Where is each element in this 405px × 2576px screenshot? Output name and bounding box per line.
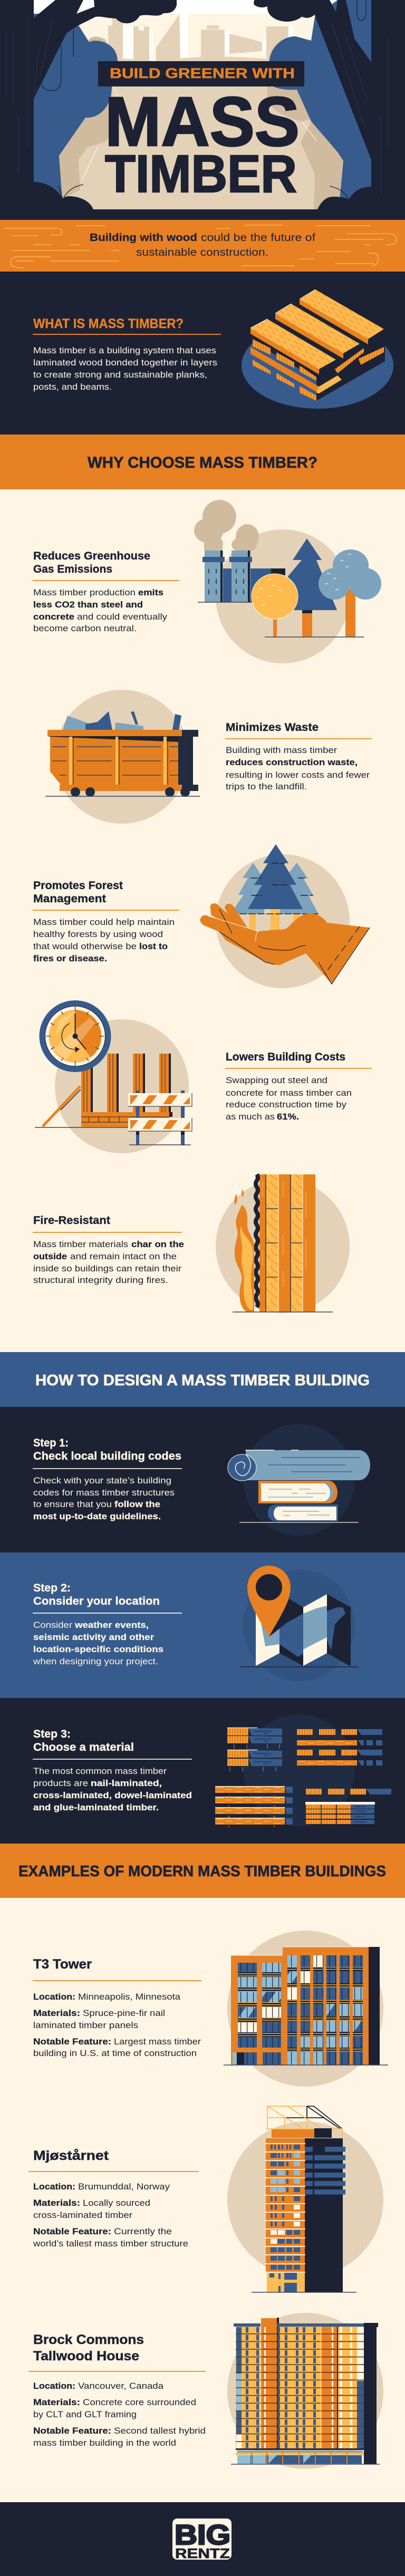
illustration: clock and posts xyxy=(35,1000,192,1153)
heading: Choose a material xyxy=(33,1741,134,1753)
body text xyxy=(226,1075,352,1122)
title: mass timber: TIMBER xyxy=(105,144,297,204)
details: Notable Feature: xyxy=(33,2426,111,2436)
body text: and glue-laminated timber. xyxy=(33,1802,159,1812)
body text: concrete xyxy=(33,612,74,622)
body text: 61%. xyxy=(277,1112,299,1122)
body text xyxy=(33,1766,192,1812)
details xyxy=(33,2182,188,2249)
dowel-laminated sample xyxy=(215,1786,293,1827)
heading xyxy=(33,2332,144,2363)
details: Notable Feature: xyxy=(33,2226,111,2236)
panel: step 2 xyxy=(33,1566,359,1681)
details: Materials: xyxy=(33,2008,80,2018)
heading: Management xyxy=(33,893,106,905)
intro band xyxy=(4,225,397,268)
decorative wood grain lines xyxy=(4,225,397,268)
heading: Gas Emissions xyxy=(33,563,112,575)
details: Location: xyxy=(33,2381,75,2391)
heading: Tallwood House xyxy=(33,2349,139,2363)
panel: what is mass timber xyxy=(33,290,393,409)
intro text: could be the future of xyxy=(201,232,315,244)
left block windows xyxy=(233,1963,281,2065)
illustration: map and pin xyxy=(239,1566,359,1681)
details: Materials: xyxy=(33,2397,80,2407)
hero scene: dark tree frame xyxy=(0,0,405,220)
details xyxy=(33,2381,206,2448)
heading: T3 Tower xyxy=(33,1957,92,1972)
intro text: sustainable construction. xyxy=(136,247,268,258)
body text: Mass timber is a building system that uses xyxy=(33,345,216,355)
heading xyxy=(33,550,150,575)
body text: trips to the landfill. xyxy=(226,782,307,792)
body text: Building with mass timber xyxy=(226,745,337,755)
heading: Check local building codes xyxy=(33,1450,181,1462)
details: world’s tallest mass timber structure xyxy=(33,2239,188,2249)
footer logo xyxy=(172,2519,232,2561)
details: Location: xyxy=(33,2182,75,2192)
details: cross-laminated timber xyxy=(33,2210,132,2220)
body text: Consider xyxy=(33,1620,72,1630)
body text: that would otherwise be xyxy=(33,941,137,951)
details xyxy=(33,1992,201,2058)
heading: Brock Commons xyxy=(33,2332,144,2347)
body text: inside so buildings can retain their xyxy=(33,1263,181,1273)
illustration: dumpster xyxy=(45,690,200,824)
body text: reduces construction waste, xyxy=(226,757,358,767)
panel: T3 Tower xyxy=(33,1931,388,2087)
title: mass timber xyxy=(105,83,300,204)
body text: Mass timber materials xyxy=(33,1239,128,1249)
floors xyxy=(265,2143,305,2273)
panel: building costs xyxy=(35,1000,372,1153)
body text xyxy=(33,917,175,963)
panel: Mjostarnet xyxy=(28,2106,383,2292)
details: Second tallest hybrid xyxy=(114,2426,206,2436)
body text: location-specific conditions xyxy=(33,1644,163,1654)
body text: nail-laminated, xyxy=(91,1778,162,1788)
body text: Check with your state’s building xyxy=(33,1475,171,1485)
panel: minimizes waste xyxy=(45,690,372,824)
illustration: factory and trees xyxy=(194,500,381,663)
details: building in U.S. at time of construction xyxy=(33,2048,197,2058)
body text: follow the xyxy=(114,1499,160,1509)
heading: Mjøstårnet xyxy=(33,2148,109,2163)
heading: Step 1: xyxy=(33,1437,69,1449)
body text: most up-to-date guidelines. xyxy=(33,1511,161,1521)
title ribbon xyxy=(98,61,304,86)
illustration: hand holding trees xyxy=(200,844,370,988)
body text: become carbon neutral. xyxy=(33,623,137,633)
body text: to create strong and sustainable planks, xyxy=(33,370,207,380)
details: mass timber building in the world xyxy=(33,2438,176,2448)
details: Location: xyxy=(33,1992,75,2002)
body text: fires or disease. xyxy=(33,953,107,963)
body text: and remain intact on the xyxy=(70,1251,177,1261)
hero scene: tan road xyxy=(54,37,349,211)
body text: Mass timber production xyxy=(33,587,136,597)
details: Concrete core surrounded xyxy=(83,2397,196,2407)
heading: WHAT IS MASS TIMBER? xyxy=(33,316,184,331)
panel: greenhouse gas xyxy=(33,500,381,663)
body text: posts, and beams. xyxy=(33,382,112,392)
body text: char on the xyxy=(131,1239,184,1249)
body text: less CO2 than steel and xyxy=(33,600,143,610)
panel: step 3 xyxy=(33,1714,391,1827)
body text xyxy=(33,1239,184,1285)
details: Spruce-pine-fir nail xyxy=(83,2008,165,2018)
body text xyxy=(33,345,217,392)
heading: Reduces Greenhouse xyxy=(33,550,150,562)
cross-laminated sample xyxy=(297,1729,382,1765)
right block windows xyxy=(287,1955,363,2065)
heading: Promotes Forest xyxy=(33,880,123,892)
body text: to ensure that you xyxy=(33,1499,112,1509)
heading: why choose: WHY CHOOSE MASS TIMBER? xyxy=(88,454,317,471)
illustration: T3 building xyxy=(224,1931,388,2087)
panel: Brock Commons xyxy=(28,2313,383,2469)
body text: weather events, xyxy=(74,1620,149,1630)
podium xyxy=(236,2448,364,2464)
panel: forest management xyxy=(33,844,370,988)
heading: Minimizes Waste xyxy=(226,721,319,734)
body text: emits xyxy=(138,587,163,597)
glue-laminated sample xyxy=(305,1789,391,1824)
illustration: scroll and books xyxy=(228,1424,370,1536)
details: Minneapolis, Minnesota xyxy=(78,1992,181,2002)
outer window columns xyxy=(236,2327,364,2448)
hero panel xyxy=(0,0,405,220)
icon: clock xyxy=(39,1000,111,1072)
body text: concrete for mass timber can xyxy=(226,1088,352,1098)
body text xyxy=(33,587,168,633)
body text: products are xyxy=(33,1778,88,1788)
heading: how to design: HOW TO DESIGN A MASS TIMBER BUILDING xyxy=(35,1372,370,1389)
body text: The most common mass timber xyxy=(33,1766,167,1776)
title: mass timber: MASS xyxy=(105,83,300,160)
body text: when designing your project. xyxy=(33,1656,158,1666)
body text: reduce construction time by xyxy=(226,1099,347,1109)
panel: step 1 xyxy=(33,1424,370,1536)
nail-laminated sample xyxy=(227,1728,282,1771)
windows xyxy=(271,2145,300,2270)
heading: Step 3: xyxy=(33,1728,71,1740)
heading xyxy=(33,1582,160,1607)
heading: Step 2: xyxy=(33,1582,71,1594)
details: by CLT and GLT framing xyxy=(33,2409,137,2419)
heading: Lowers Building Costs xyxy=(226,1051,345,1063)
illustration: timber product samples xyxy=(215,1714,391,1827)
illustration: Brock Commons tower xyxy=(227,2313,383,2469)
footer logo: BIG xyxy=(175,2520,230,2551)
footer logo: RENTZ xyxy=(175,2545,230,2561)
hero scene: sky and city xyxy=(34,0,371,203)
heading: examples: EXAMPLES OF MODERN MASS TIMBER BUILDINGS xyxy=(18,1863,386,1880)
body text xyxy=(226,745,370,792)
details: Largest mass timber xyxy=(114,2037,201,2047)
title kicker: BUILD GREENER WITH xyxy=(110,65,295,81)
heading: Consider your location xyxy=(33,1595,160,1607)
icon: timber stack xyxy=(242,290,393,409)
balconies xyxy=(305,2147,345,2195)
heading xyxy=(33,880,123,905)
body text: as much as xyxy=(226,1112,275,1122)
intro text xyxy=(90,232,315,258)
details: laminated timber panels xyxy=(33,2020,138,2030)
body text: laminated wood bonded together in layers xyxy=(33,358,217,368)
details: Currently the xyxy=(114,2226,172,2236)
body text xyxy=(33,1620,163,1666)
body text: cross-laminated, dowel-laminated xyxy=(33,1790,192,1800)
illustration: Mjostarnet tower xyxy=(227,2106,383,2292)
roof lattice xyxy=(267,2106,342,2138)
details: Locally sourced xyxy=(83,2198,150,2208)
body text: healthy forests by using wood xyxy=(33,929,163,939)
body text: Swapping out steel and xyxy=(226,1075,327,1085)
body text xyxy=(33,1475,175,1521)
hero scene: blue foliage xyxy=(32,0,371,158)
panel: fire resistant xyxy=(33,1174,350,1313)
details: Notable Feature: xyxy=(33,2037,111,2047)
body text: outside xyxy=(33,1251,67,1261)
details: Brumunddal, Norway xyxy=(78,2182,170,2192)
floors xyxy=(236,2327,364,2450)
details: Vancouver, Canada xyxy=(78,2381,164,2391)
body text: seismic activity and other xyxy=(33,1632,154,1642)
illustration: charred wall and flame xyxy=(216,1174,350,1313)
heading xyxy=(33,1437,181,1462)
heading xyxy=(33,1728,134,1753)
heading: Fire-Resistant xyxy=(33,1214,110,1227)
intro text: Building with wood xyxy=(90,232,197,244)
body text: codes for mass timber structures xyxy=(33,1488,175,1498)
body text: structural integrity during fires. xyxy=(33,1275,168,1285)
body text: Mass timber could help maintain xyxy=(33,917,175,927)
body text: resulting in lower costs and fewer xyxy=(226,770,370,780)
body text: lost to xyxy=(139,941,168,951)
details: Materials: xyxy=(33,2198,80,2208)
body text: and could eventually xyxy=(77,612,168,622)
